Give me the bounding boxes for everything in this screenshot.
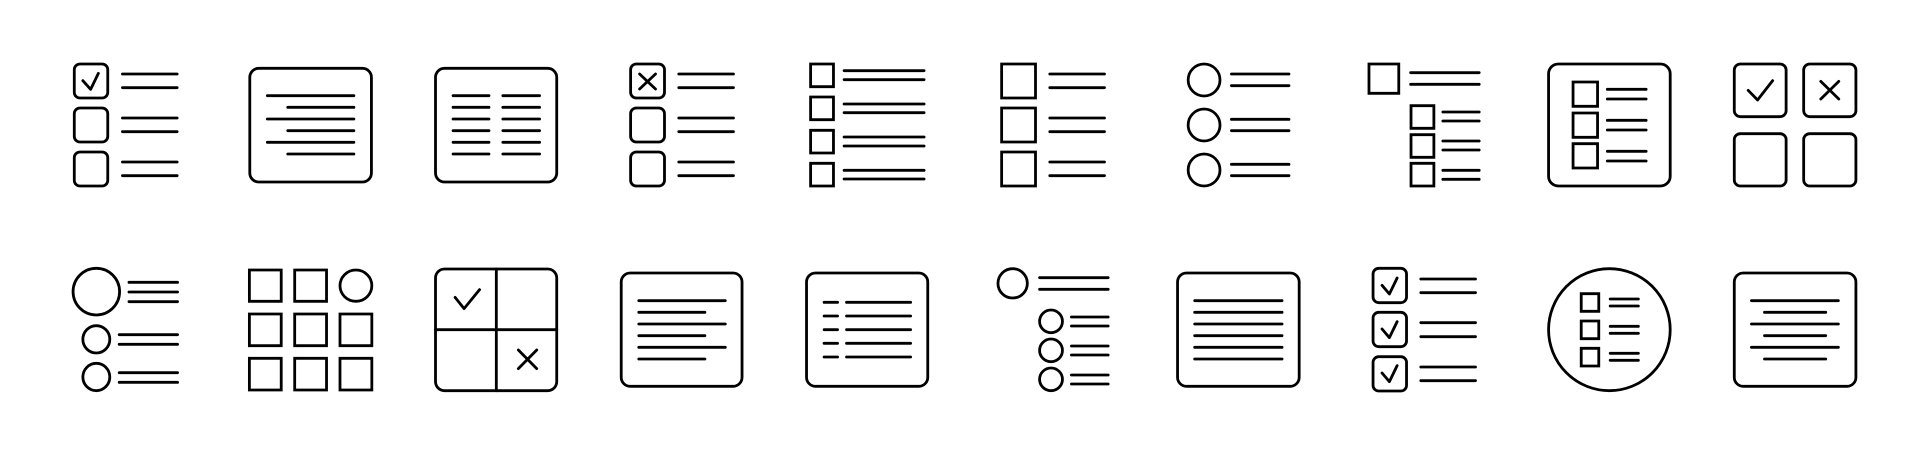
icon: checklist inside circle [1549,269,1670,391]
icon: three-row square checklist [1002,64,1104,186]
icon: nested circle list [998,269,1108,391]
icon: fully checked checklist [1373,268,1476,391]
icon: checklist with one checked box [74,64,177,186]
icon: document with right-aligned text [250,68,371,182]
icon: nested square list [1369,64,1479,186]
icon: document with left-aligned text [621,273,742,386]
icon: document with centered text [1734,273,1856,386]
icon: document with two text columns [436,68,557,182]
icon: three-row circle list [1188,64,1289,186]
icon: four tiles with check and cross [1734,64,1856,186]
icon: checklist with one crossed box [631,64,733,186]
icon: circle list with large first item [73,268,178,391]
icon: document with justified text [1178,273,1299,386]
icon: grid of squares with one circle [249,270,372,390]
icon: four-row square checklist [811,64,924,186]
icon: framed square checklist [1549,64,1670,186]
icon: document with bulleted dashes [807,273,928,386]
icon: quadrant with check and cross [436,269,557,391]
